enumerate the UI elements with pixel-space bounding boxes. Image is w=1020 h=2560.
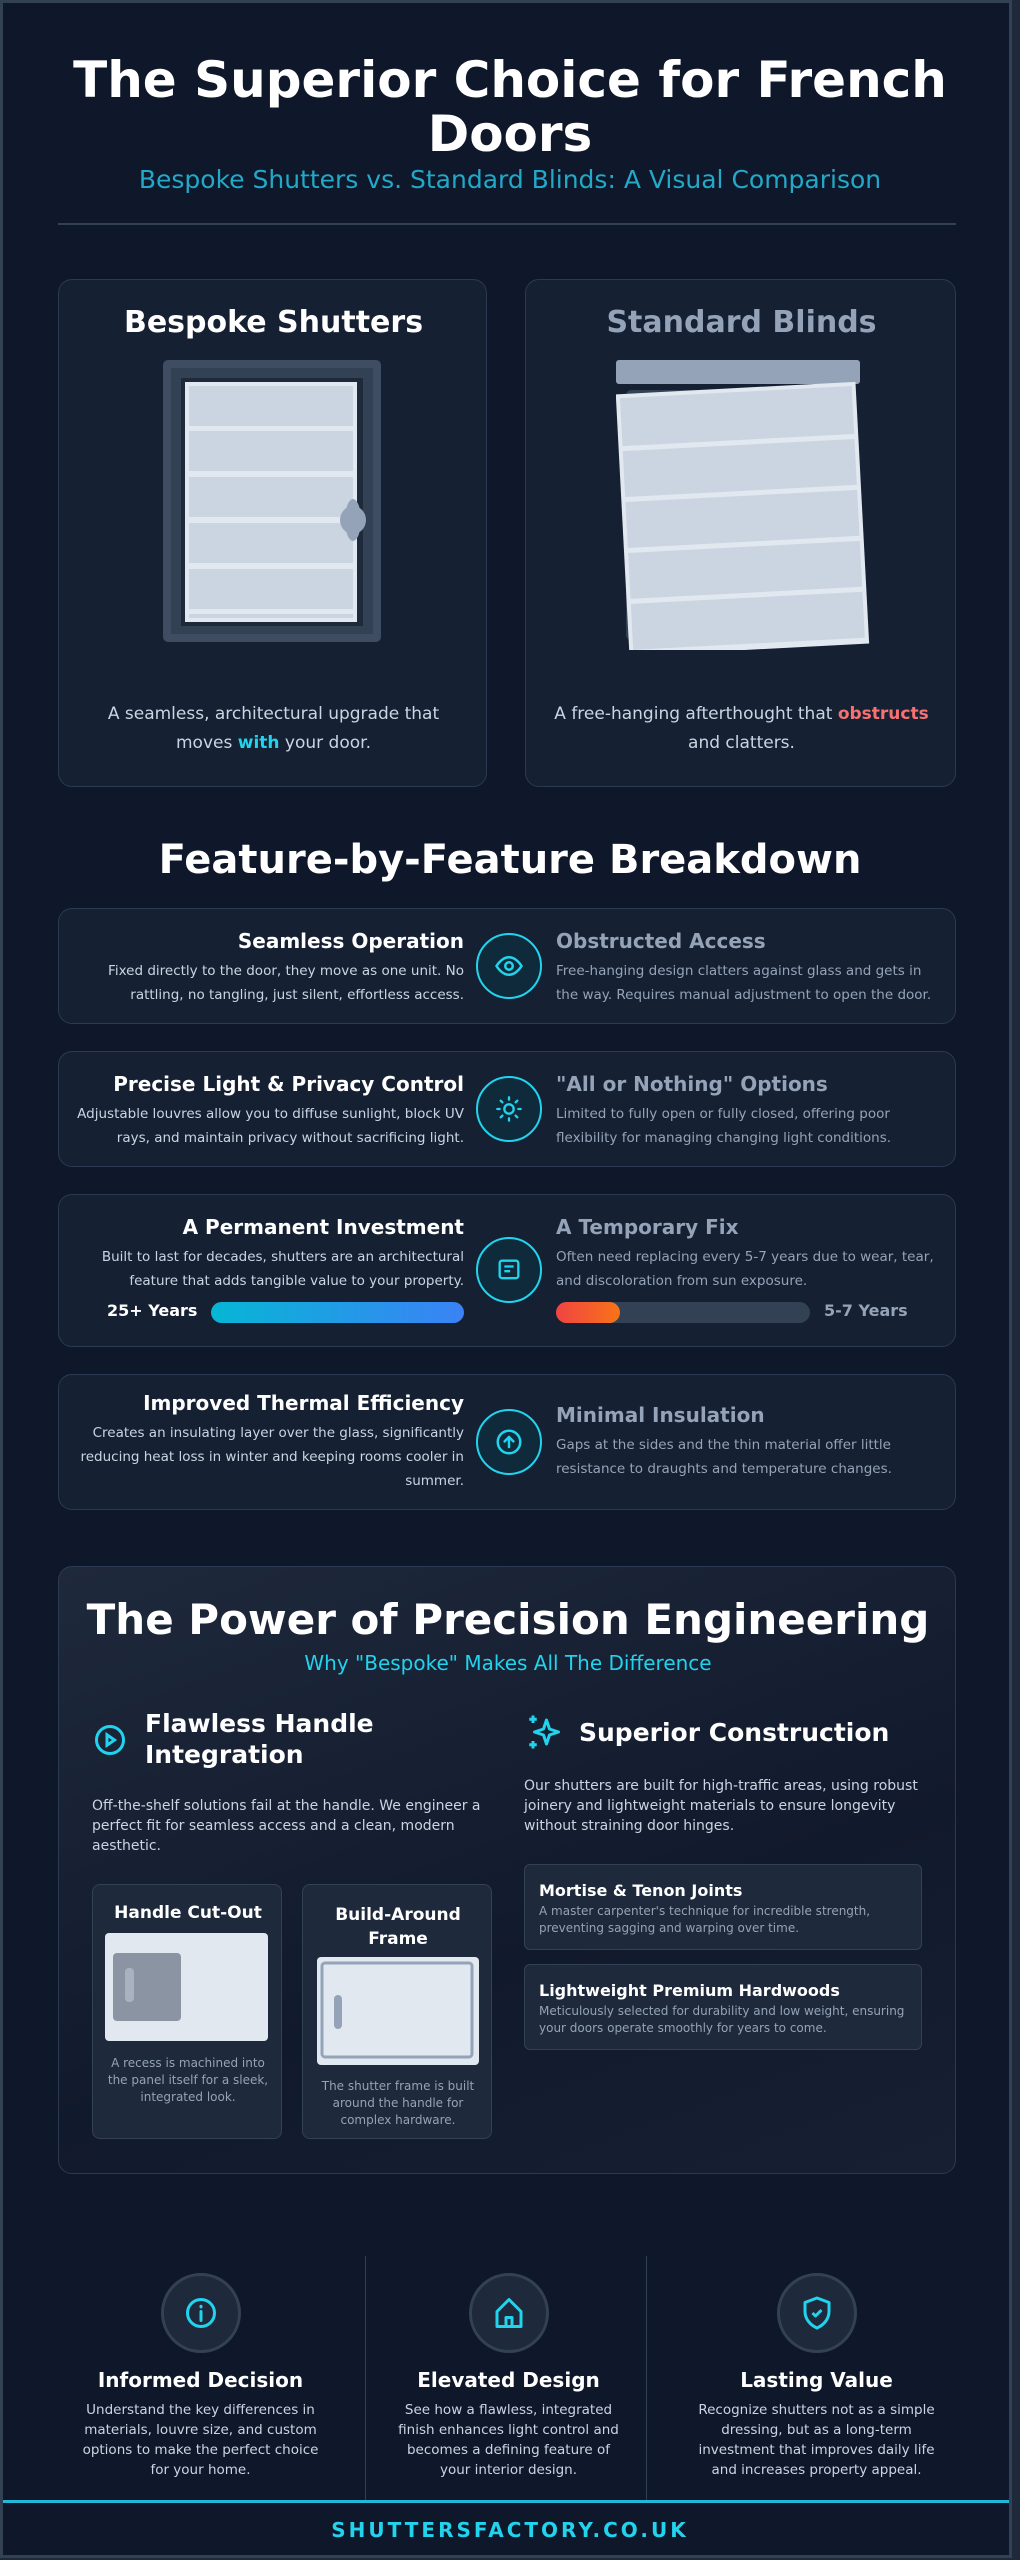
panel: bespoke shutters <box>58 279 487 787</box>
panel: row 4 thermal <box>58 1374 956 1510</box>
text: all or nothing: Limited to fully open or fully closed, offering poor flexibility for managing changing light conditions. <box>556 1106 891 1146</box>
column: lasting value: Recognize shutters not as a simple dressing, but as a long-term investment that improves daily life and increases property appeal. <box>698 2402 935 2478</box>
heading: standard blinds: Standard Blinds <box>606 305 877 340</box>
text: permanent investment: A Permanent Investment <box>183 1215 464 1239</box>
panel: precision engineering <box>58 1566 956 2174</box>
icon: eye <box>476 933 542 999</box>
column: lasting value <box>698 2273 935 2478</box>
column: superior construction <box>524 1716 922 2050</box>
icon: document <box>476 1237 542 1303</box>
footer: website: SHUTTERSFACTORY.CO.UK <box>331 2518 689 2542</box>
column: elevated design <box>398 2273 619 2478</box>
text: light control <box>77 1072 464 1146</box>
column: handle integration <box>92 1709 492 2139</box>
panel: row 1 operation <box>58 908 956 1024</box>
heading: superior construction: Superior Construction <box>579 1718 889 1747</box>
caption: shutters: A seamless, architectural upgrade that moves with your door. <box>108 704 439 753</box>
text: seamless operation: Seamless Operation <box>238 929 464 953</box>
heading: feature breakdown: Feature-by-Feature Breakdown <box>159 837 861 883</box>
text: light control: Precise Light & Privacy Control <box>113 1072 464 1096</box>
text: thermal efficiency <box>80 1391 464 1489</box>
column: lasting value: Lasting Value <box>740 2368 893 2392</box>
text: thermal efficiency: Improved Thermal Efficiency <box>143 1391 464 1415</box>
text: temporary fix <box>556 1215 934 1289</box>
card: mortise <box>524 1864 922 1950</box>
card: build-around frame: Build-Around Frame <box>335 1905 461 1949</box>
text: permanent investment: Built to last for decades, shutters are an architectural feature that adds tangible value to your property. <box>102 1249 464 1289</box>
text: seamless operation: Fixed directly to the door, they move as one unit. No rattling, no tangling, just silent, effortless access. <box>108 963 464 1003</box>
text: obstructed access <box>556 929 931 1003</box>
heading: precision engineering: The Power of Precision Engineering <box>87 1595 929 1644</box>
text: all or nothing: "All or Nothing" Options <box>556 1072 828 1096</box>
card: handle cut-out: A recess is machined into the panel itself for a sleek, integrated look. <box>108 2056 268 2104</box>
caption: blinds: A free-hanging afterthought that obstructs and clatters. <box>554 704 929 753</box>
panel: standard blinds <box>525 279 956 787</box>
text: minimal insulation: Gaps at the sides and the thin material offer little resistance to draughts and temperature changes. <box>556 1437 892 1477</box>
panel: row 3 investment <box>58 1194 956 1347</box>
card: build-around frame: The shutter frame is built around the handle for complex hardware. <box>322 2079 474 2127</box>
text: minimal insulation <box>556 1403 892 1477</box>
text: permanent investment <box>102 1215 464 1289</box>
bar: 5-7 years <box>556 1301 908 1323</box>
text: all or nothing <box>556 1072 891 1146</box>
card: hardwoods: Meticulously selected for durability and low weight, ensuring your doors operate smoothly for years to come. <box>539 2004 904 2035</box>
text: minimal insulation: Minimal Insulation <box>556 1403 765 1427</box>
subtitle: Bespoke Shutters vs. Standard Blinds: A Visual Comparison <box>139 165 881 194</box>
icon: sparkle <box>529 1716 560 1748</box>
card: mortise: Mortise & Tenon Joints <box>539 1881 742 1900</box>
panel: row 2 light <box>58 1051 956 1167</box>
bar: 25+ years: 25+ Years <box>107 1301 197 1320</box>
bar: 5-7 years: 5-7 Years <box>824 1301 908 1320</box>
card: mortise: A master carpenter's technique for incredible strength, preventing sagging and warping over time. <box>539 1904 870 1935</box>
column: informed decision <box>83 2273 318 2478</box>
icon: sun <box>476 1076 542 1142</box>
icon: play circle <box>95 1725 125 1755</box>
text: obstructed access: Obstructed Access <box>556 929 766 953</box>
text: light control: Adjustable louvres allow you to diffuse sunlight, block UV rays, and maintain privacy without sacrificing light. <box>77 1106 464 1146</box>
column: informed decision: Informed Decision <box>98 2368 303 2392</box>
text: temporary fix: A Temporary Fix <box>556 1215 739 1239</box>
text: handle intro: Off-the-shelf solutions fail at the handle. We engineer a perfect fit for seamless access and a clean, modern aesthetic. <box>92 1798 481 1854</box>
icon: shield <box>777 2273 857 2353</box>
heading: flawless handle: Integration <box>145 1740 304 1769</box>
illustration: frame <box>317 1957 479 2065</box>
card: hardwoods <box>524 1964 922 2050</box>
text: seamless operation <box>108 929 464 1003</box>
card: handle cut-out <box>92 1884 282 2139</box>
text: thermal efficiency: Creates an insulating layer over the glass, significantly reducing heat loss in winter and keeping rooms cooler in summer. <box>80 1425 464 1489</box>
heading: bespoke shutters: Bespoke Shutters <box>124 305 423 340</box>
heading: flawless handle <box>145 1709 374 1769</box>
illustration: shutter door <box>163 360 381 642</box>
subtitle: why bespoke: Why "Bespoke" Makes All The Difference <box>304 1651 712 1675</box>
illustration: cutout <box>105 1933 268 2041</box>
column: elevated design: Elevated Design <box>417 2368 600 2392</box>
icon: info <box>161 2273 241 2353</box>
column: informed decision: Understand the key differences in materials, louvre size, and custom options to make the perfect choice for your home. <box>83 2402 318 2478</box>
text: obstructed access: Free-hanging design clatters against glass and gets in the way. Requires manual adjustment to open the door. <box>556 963 931 1003</box>
column: elevated design: See how a flawless, integrated finish enhances light control and becomes a defining feature of your interior design. <box>398 2402 619 2478</box>
illustration: blind <box>616 360 870 650</box>
card: hardwoods: Lightweight Premium Hardwoods <box>539 1981 840 2000</box>
title: The Superior Choice for French Doors <box>73 51 947 163</box>
icon: arrow up circle <box>476 1409 542 1475</box>
card: build-around frame <box>302 1884 492 2139</box>
text: temporary fix: Often need replacing every 5-7 years due to wear, tear, and discoloration from sun exposure. <box>556 1249 934 1289</box>
card: handle cut-out: Handle Cut-Out <box>114 1903 262 1923</box>
heading: flawless handle: Flawless Handle <box>145 1709 374 1738</box>
icon: house <box>469 2273 549 2353</box>
bar: 25+ years <box>107 1301 464 1323</box>
text: construction intro: Our shutters are built for high-traffic areas, using robust joinery and lightweight materials to ensure longevity without straining door hinges. <box>524 1778 918 1834</box>
